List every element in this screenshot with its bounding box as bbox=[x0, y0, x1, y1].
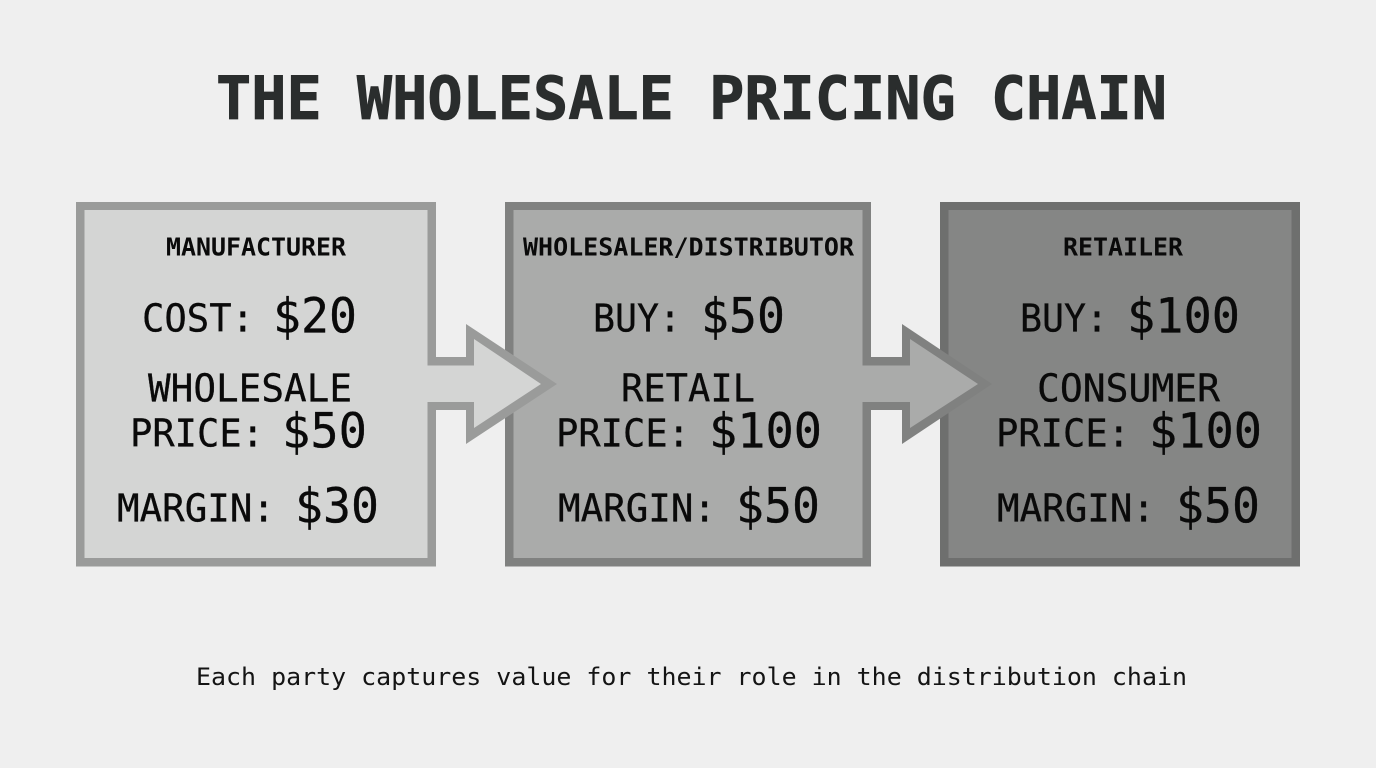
wholesale price row: WHOLESALE bbox=[148, 366, 352, 410]
retail price row bbox=[556, 366, 822, 460]
consumer price row: PRICE: bbox=[996, 412, 1130, 456]
retail price row: RETAIL bbox=[621, 366, 755, 410]
retail price row: $100 bbox=[709, 404, 822, 460]
margin row bbox=[117, 478, 379, 534]
buy row bbox=[593, 288, 785, 344]
footer caption: Each party captures value for their role in the distribution chain bbox=[196, 663, 1187, 691]
heading: retailer: RETAILER bbox=[1063, 232, 1184, 262]
arrow: wholesaler to retailer bbox=[862, 324, 992, 444]
buy row: $50 bbox=[701, 288, 785, 344]
margin row bbox=[997, 478, 1260, 534]
margin row: MARGIN: bbox=[117, 486, 275, 530]
buy row: BUY: bbox=[1020, 296, 1108, 340]
cost row bbox=[142, 288, 357, 344]
heading: wholesaler/distributor: WHOLESALER/DISTRIBUTOR bbox=[523, 232, 855, 262]
buy row: $100 bbox=[1127, 288, 1240, 344]
panel: manufacturer bbox=[76, 202, 436, 566]
margin row: $50 bbox=[1176, 478, 1260, 534]
panel: retailer bbox=[940, 202, 1300, 566]
margin row: MARGIN: bbox=[997, 486, 1155, 530]
arrow: manufacturer to wholesaler bbox=[427, 324, 557, 444]
buy row bbox=[1020, 288, 1240, 344]
margin row bbox=[558, 478, 820, 534]
margin row: $50 bbox=[736, 478, 820, 534]
consumer price row bbox=[996, 366, 1262, 460]
cost row: $20 bbox=[273, 288, 357, 344]
wholesale price row: $50 bbox=[282, 404, 367, 460]
wholesale price row bbox=[130, 366, 367, 460]
margin row: $30 bbox=[295, 478, 379, 534]
consumer price row: CONSUMER bbox=[1037, 366, 1220, 410]
retail price row: PRICE: bbox=[556, 412, 690, 456]
consumer price row: $100 bbox=[1149, 404, 1262, 460]
buy row: BUY: bbox=[593, 296, 681, 340]
panel: wholesaler/distributor bbox=[505, 202, 871, 566]
heading: manufacturer: MANUFACTURER bbox=[166, 232, 347, 262]
cost row: COST: bbox=[142, 296, 254, 340]
title: THE WHOLESALE PRICING CHAIN bbox=[216, 64, 1167, 134]
margin row: MARGIN: bbox=[558, 486, 716, 530]
wholesale price row: PRICE: bbox=[130, 412, 264, 456]
